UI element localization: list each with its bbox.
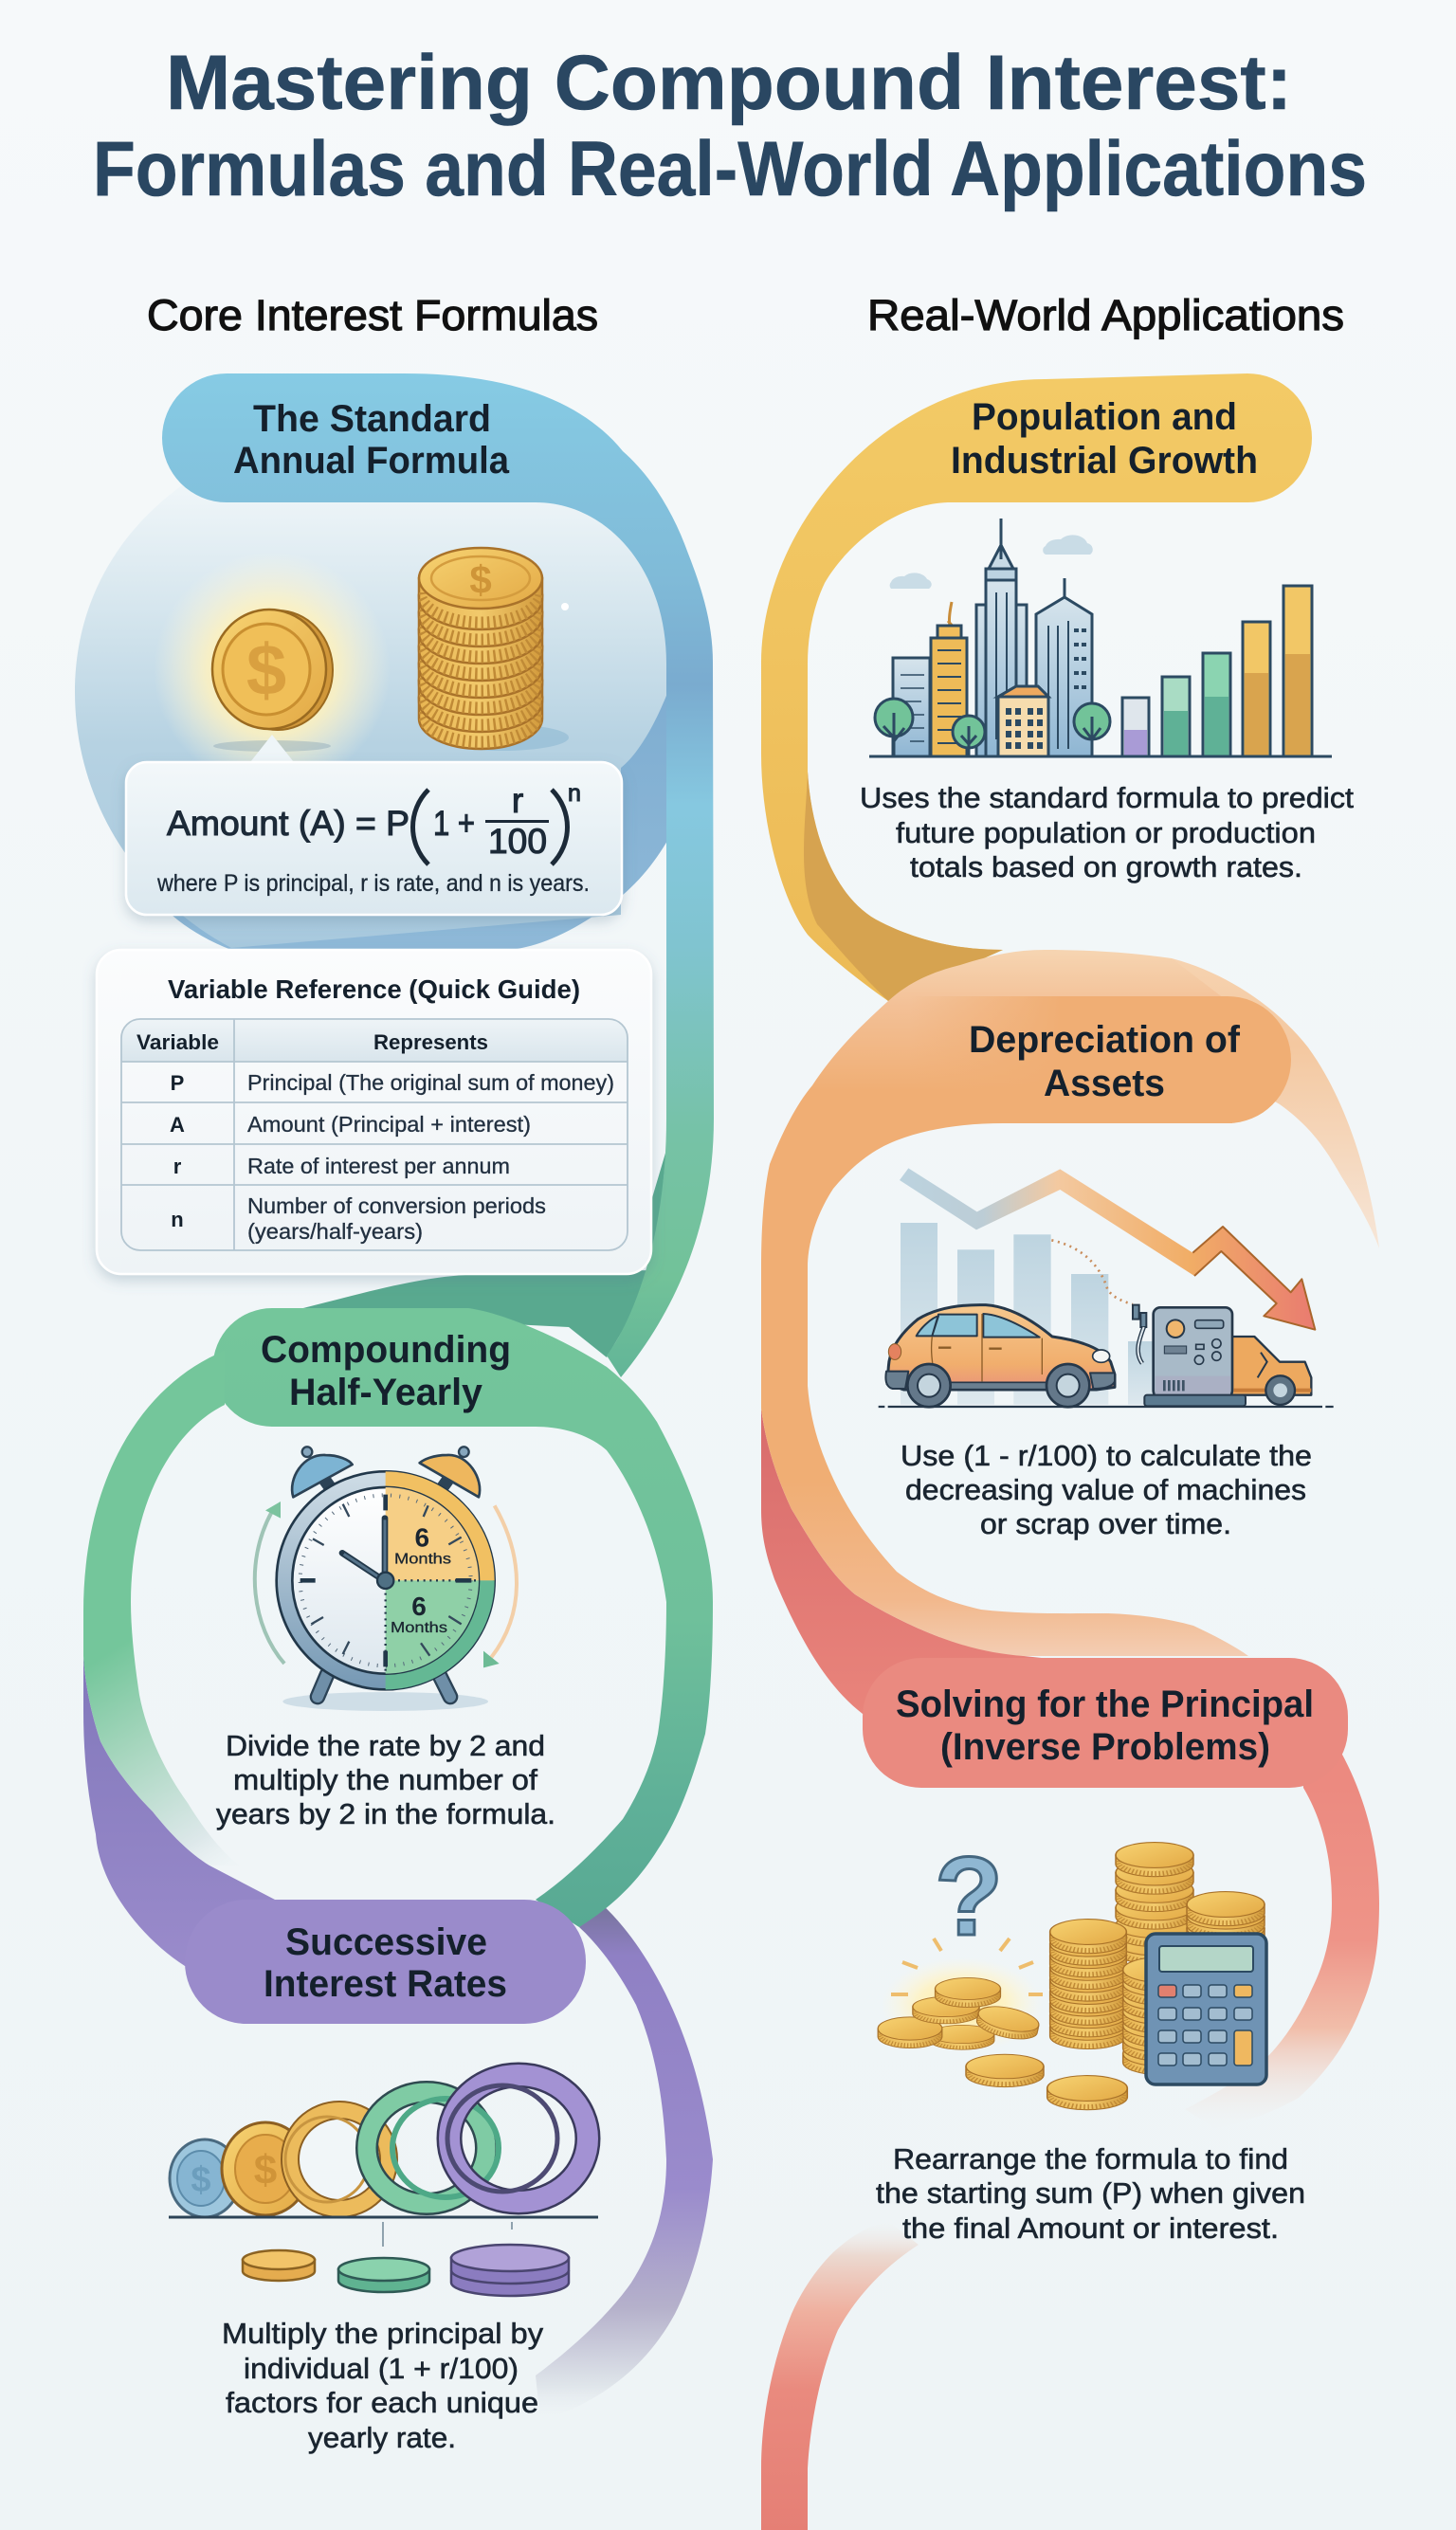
clock labels: Months [391,1620,447,1636]
icon: coins, question mark and calculator [878,1834,1266,2110]
formula: 100 [488,822,547,861]
header text: Depreciation of [969,1019,1241,1061]
text: successive rates description: individual (1 + r/100) [244,2352,519,2385]
ribbon shadow [284,1150,666,1357]
text: population description: future population or production [896,816,1316,849]
panel: standard annual formula [75,373,714,1377]
soft blue blob [75,474,678,948]
ribbon fold [804,772,1003,1001]
text: compounding description: Divide the rate by 2 and [226,1729,545,1762]
header text [896,1684,1314,1768]
text: principal description: Rearrange the formula to find [893,2142,1288,2175]
text: compounding description: years by 2 in the formula. [216,1797,555,1830]
purple ribbon left [83,1656,284,1972]
header text [969,1019,1241,1104]
icon: alarm clock [255,1447,517,1711]
text: depreciation description: decreasing value of machines [905,1473,1306,1506]
text: principal description [876,2142,1305,2245]
icon: coin stack: $ [469,557,492,602]
text: principal description: the starting sum (P) when given [876,2176,1305,2210]
small car [1229,1337,1311,1395]
fuel pump [1133,1305,1146,1327]
text: principal description: the final Amount or interest. [902,2211,1279,2245]
text: depreciation description: or scrap over time. [980,1507,1231,1540]
table: n [171,1208,184,1231]
table: A [170,1113,185,1137]
heading: core interest formulas: Core Interest Formulas [147,291,598,339]
header pill: successive interest rates: Interest Rates [264,1963,507,2005]
text: compounding description [216,1729,555,1830]
heading: compounding half-yearly: Compounding [261,1329,511,1371]
formula: r [512,781,523,820]
header text: (Inverse Problems) [940,1726,1270,1768]
text: compounding description: multiply the number of [233,1763,537,1796]
table: Represents [373,1030,488,1054]
header text [233,398,510,482]
table: Rate of interest per annum [247,1154,510,1178]
panel: successive interest rates ribbon [536,1903,713,2422]
header pill [863,1658,1348,1788]
header text: Population and [972,396,1237,438]
panel: depreciation ribbon [761,950,1291,1656]
lower ribbon [761,2221,919,2530]
clock labels [391,1523,451,1636]
icon: coin stack [419,548,569,751]
formula [167,780,581,865]
formula: n [568,780,581,807]
heading: real-world applications: Real-World Applications [867,291,1344,339]
clock labels: 6 [415,1523,429,1553]
variable reference card [97,950,651,1274]
icon: glowing dollar coin: $ [246,630,286,711]
clock labels: 6 [411,1592,427,1621]
header pill: successive interest rates [185,1900,586,2024]
panel: principal ribbon left [761,1409,1138,1763]
header text: Industrial Growth [951,440,1258,482]
header text [951,396,1258,482]
title [93,40,1367,212]
icon: coins and rings: $ [254,2147,277,2193]
text: depreciation description: Use (1 - r/100) to calculate the [901,1439,1312,1472]
panel: solving for the principal [761,1658,1379,2530]
icon: glowing dollar coin [154,552,391,789]
heading: compounding half-yearly [261,1329,511,1413]
table: (years/half-years) [247,1219,423,1244]
coin pile [878,1977,1127,2110]
formula: Amount (A) = P [167,804,410,843]
arrow: decline [900,1168,1315,1330]
text: population description: totals based on growth rates. [910,850,1302,883]
coin stacks [1050,1843,1265,2075]
text: successive rates description [222,2317,544,2454]
clock arrows [255,1512,284,1664]
calculator [1146,1934,1266,2084]
table title: Variable Reference (Quick Guide) [168,974,580,1004]
formula caption: where P is principal, r is rate, and n is years. [156,870,590,897]
table: Principal (The original sum of money) [247,1070,614,1095]
icon: city skyline and growth bars [869,519,1332,756]
table: r [173,1155,182,1178]
formula: 1 + [433,804,475,843]
formula card [126,735,622,915]
table [121,1019,628,1250]
table: Amount (Principal + interest) [247,1112,531,1137]
ribbon wing [1172,958,1379,1248]
table: Number of conversion periods [247,1193,546,1218]
header pill [901,996,1291,1123]
text: successive rates description: yearly rate. [308,2421,456,2454]
text: population description: Uses the standard formula to predict [860,781,1354,814]
main car [887,1305,1115,1390]
header text: The Standard [253,398,491,440]
panel: compounding ribbon [212,1308,713,1927]
table: Variable [136,1030,219,1054]
right ribbon [1185,1753,1379,2128]
icon: coins and rings [169,2075,598,2296]
header text: Assets [1044,1063,1165,1104]
clock labels: Months [394,1551,451,1567]
header text: Solving for the Principal [896,1684,1314,1725]
text: successive rates description: Multiply the principal by [222,2317,544,2350]
green ribbon left [83,1351,240,1866]
text: successive rates description: factors for each unique [226,2386,538,2419]
bar chart [1122,586,1312,756]
title: Mastering Compound Interest: [166,40,1292,126]
blue header ribbon [162,373,714,1377]
table: P [171,1071,184,1095]
icon: coins and rings: $ [191,2160,211,2200]
header pill: successive interest rates: Successive [285,1921,487,1963]
icon: depreciating car and declining chart [879,1168,1334,1407]
question mark: ? [935,1834,1003,1959]
header text: Annual Formula [233,440,510,482]
panel: population ribbon [761,373,1312,1001]
heading: compounding half-yearly: Half-Yearly [289,1372,483,1413]
text: depreciation description [901,1439,1312,1540]
ribbon crescent [142,664,713,950]
text: population description [860,781,1354,883]
